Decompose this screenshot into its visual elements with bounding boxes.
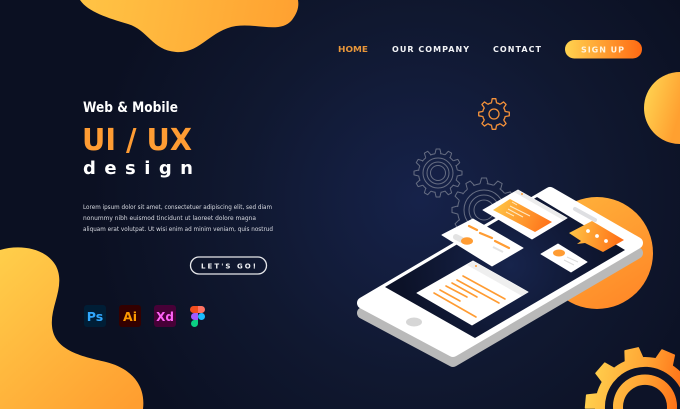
orange circle behind phone — [541, 197, 653, 309]
icon: adobe xd: Xd — [156, 310, 174, 324]
heading: UI / UX: UI / UX — [82, 123, 192, 158]
phone speaker — [575, 209, 595, 220]
card: middle panel — [442, 219, 523, 266]
top orange blob — [80, 0, 298, 52]
card: top window — [483, 190, 567, 239]
paragraph text — [83, 203, 273, 233]
navigation — [338, 40, 642, 58]
phone home button — [406, 318, 422, 326]
icon: adobe xd — [154, 305, 176, 327]
heading: web and mobile: Web & Mobile — [83, 100, 178, 116]
right orange blob — [644, 72, 680, 144]
button: let's go — [190, 257, 266, 274]
phone body — [363, 193, 637, 351]
icon: figma — [190, 306, 205, 327]
icon: photoshop — [84, 305, 106, 327]
heading: design: design — [83, 158, 193, 179]
icon: illustrator: Ai — [123, 309, 137, 324]
icon: outline gear lower — [452, 178, 516, 242]
sign up button — [565, 40, 642, 58]
isometric phone — [363, 190, 637, 361]
card: profile — [541, 244, 587, 272]
icon: small orange gear — [479, 99, 509, 129]
button: let's go: LET'S GO! — [201, 262, 256, 270]
icon: outline gear upper — [414, 149, 462, 197]
bottom-left orange blob — [0, 247, 143, 409]
nav item: our company: OUR COMPANY — [392, 45, 469, 54]
speech bubble — [569, 221, 624, 252]
icon: illustrator — [119, 305, 141, 327]
icon: large orange gear — [586, 348, 680, 409]
nav item: contact: CONTACT — [493, 45, 542, 54]
nav item: home: HOME — [338, 45, 368, 54]
phone screen — [385, 197, 625, 338]
paragraph text: nonummy nibh euismod tincidunt ut laoreet dolore magna — [83, 214, 256, 222]
phone side — [363, 203, 637, 361]
paragraph text: aliquam erat volutpat. Ut wisi enim ad minim veniam, quis nostrud — [83, 225, 273, 233]
icon: photoshop: Ps — [87, 309, 103, 324]
paragraph text: Lorem ipsum dolor sit amet, consectetuer adipiscing elit, sed diam — [83, 203, 272, 211]
sign up button: SIGN UP — [581, 46, 624, 54]
card: text document — [417, 261, 528, 325]
